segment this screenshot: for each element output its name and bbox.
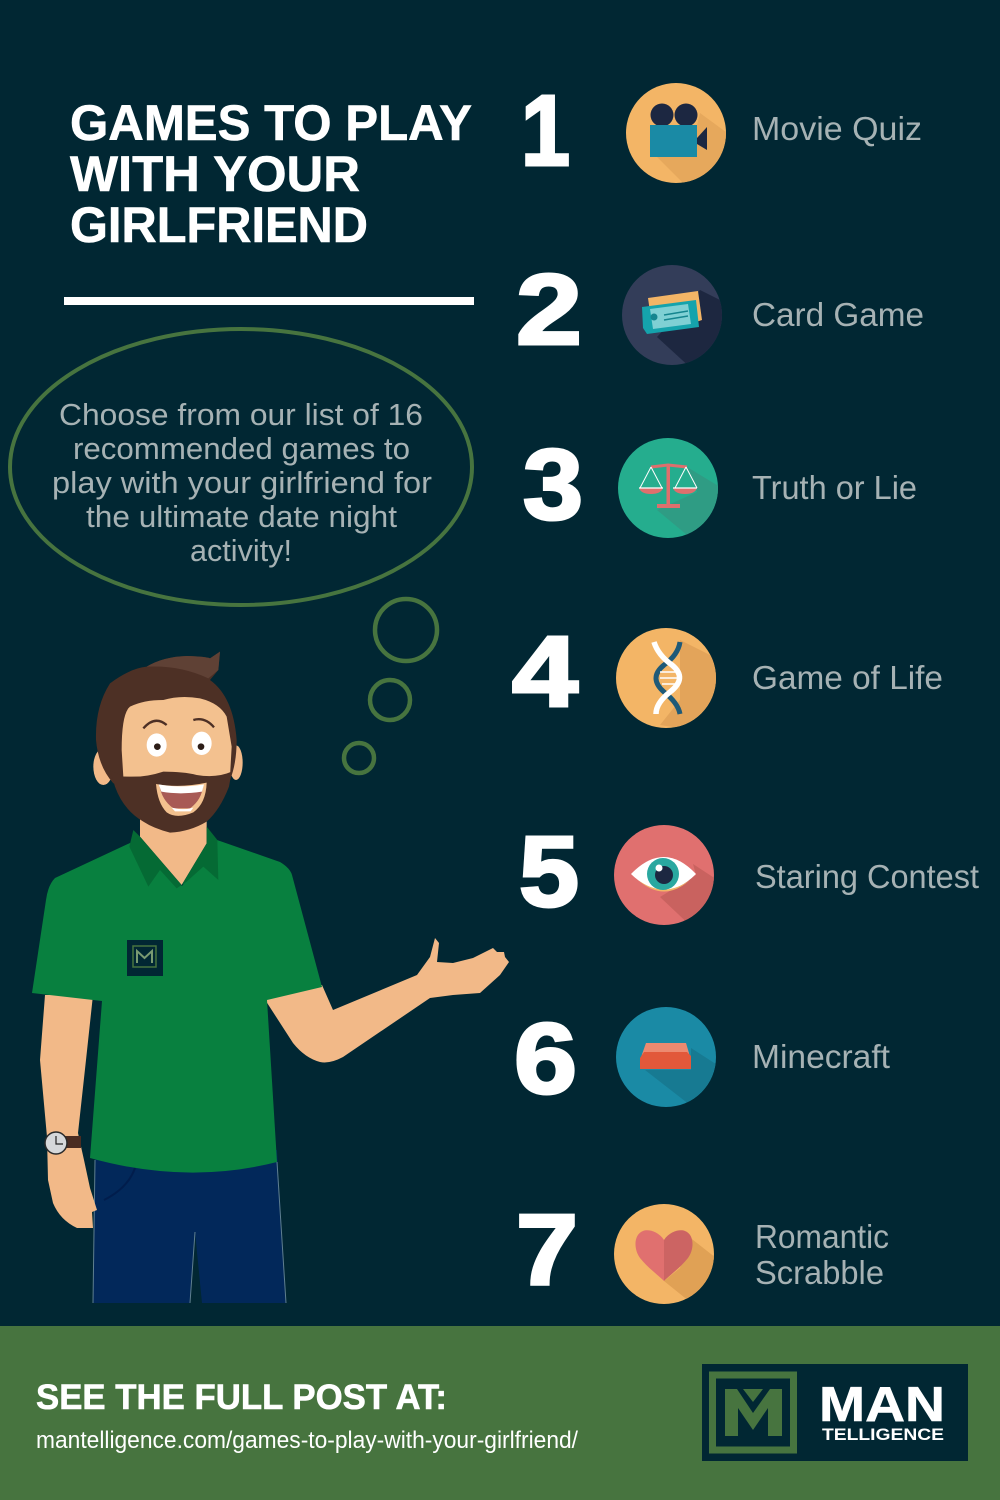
label [755, 1218, 889, 1291]
item 5: Staring Contest: 5 [519, 816, 579, 928]
thought trail circles [344, 599, 437, 773]
item 3: Truth or Lie: 3 [523, 429, 583, 541]
logo: TELLIGENCE [822, 1425, 944, 1444]
title: GIRLFRIEND [70, 197, 368, 253]
bubble text: the ultimate date night [86, 499, 397, 534]
icon: DNA helix [616, 628, 716, 728]
icon: heart [614, 1204, 714, 1304]
neck [140, 813, 207, 885]
item 6: Minecraft: 6 [514, 1003, 577, 1115]
label: Movie Quiz [752, 110, 922, 147]
item 2: Card Game [518, 265, 922, 365]
item 2: Card Game: 2 [516, 254, 582, 366]
label: Truth or Lie [752, 469, 917, 506]
item 7: Romantic Scrabble: 7 [516, 1194, 578, 1306]
title: WITH YOUR [70, 146, 360, 202]
collar [129, 827, 218, 888]
logo: MAN [819, 1378, 945, 1432]
item 1: Movie Quiz [525, 83, 920, 183]
right arm and hand [262, 938, 509, 1062]
title [70, 95, 472, 253]
face [122, 697, 232, 777]
bubble text: activity! [190, 533, 292, 568]
mouth [156, 783, 207, 816]
item 4: Game of Life [512, 628, 942, 728]
bubble text: recommended games to [73, 431, 410, 466]
bubble text [52, 397, 432, 568]
bubble text: Choose from our list of 16 [59, 397, 423, 432]
icon: ingot [616, 1007, 716, 1107]
character: man in green shirt [32, 652, 509, 1303]
footer band [0, 1326, 1000, 1500]
icon: film camera [626, 83, 726, 183]
wristwatch [45, 1132, 81, 1154]
label: Romantic [755, 1218, 889, 1255]
hair [96, 652, 237, 783]
label: Minecraft [752, 1038, 890, 1075]
left arm and hand [40, 995, 97, 1228]
logo [702, 1364, 968, 1461]
icon: scales [618, 438, 718, 538]
thought bubble [10, 329, 472, 605]
item 1: Movie Quiz: 1 [521, 75, 570, 187]
item 4: Game of Life: 4 [512, 616, 578, 728]
head and neck [93, 652, 243, 888]
bubble text: play with your girlfriend for [52, 465, 432, 500]
item 5: Staring Contest [520, 825, 979, 925]
icon: tickets [622, 265, 722, 365]
item 6: Minecraft [516, 1007, 890, 1107]
footer heading: SEE THE FULL POST AT: [36, 1378, 447, 1417]
item 7: Romantic Scrabble [519, 1204, 888, 1304]
eyes and brows [143, 719, 214, 757]
title: GAMES TO PLAY [70, 95, 472, 151]
shirt badge [127, 940, 163, 976]
icon: eye [614, 825, 714, 925]
ears [93, 745, 243, 785]
label: Scrabble [755, 1254, 884, 1291]
label: Game of Life [752, 659, 943, 696]
jeans [93, 1150, 286, 1303]
label: Card Game [752, 296, 924, 333]
item 3: Truth or Lie [524, 438, 916, 538]
footer url: mantelligence.com/games-to-play-with-your-girlfriend/ [36, 1427, 578, 1454]
label: Staring Contest [755, 858, 979, 895]
beard [110, 770, 232, 833]
shirt [32, 840, 322, 1173]
